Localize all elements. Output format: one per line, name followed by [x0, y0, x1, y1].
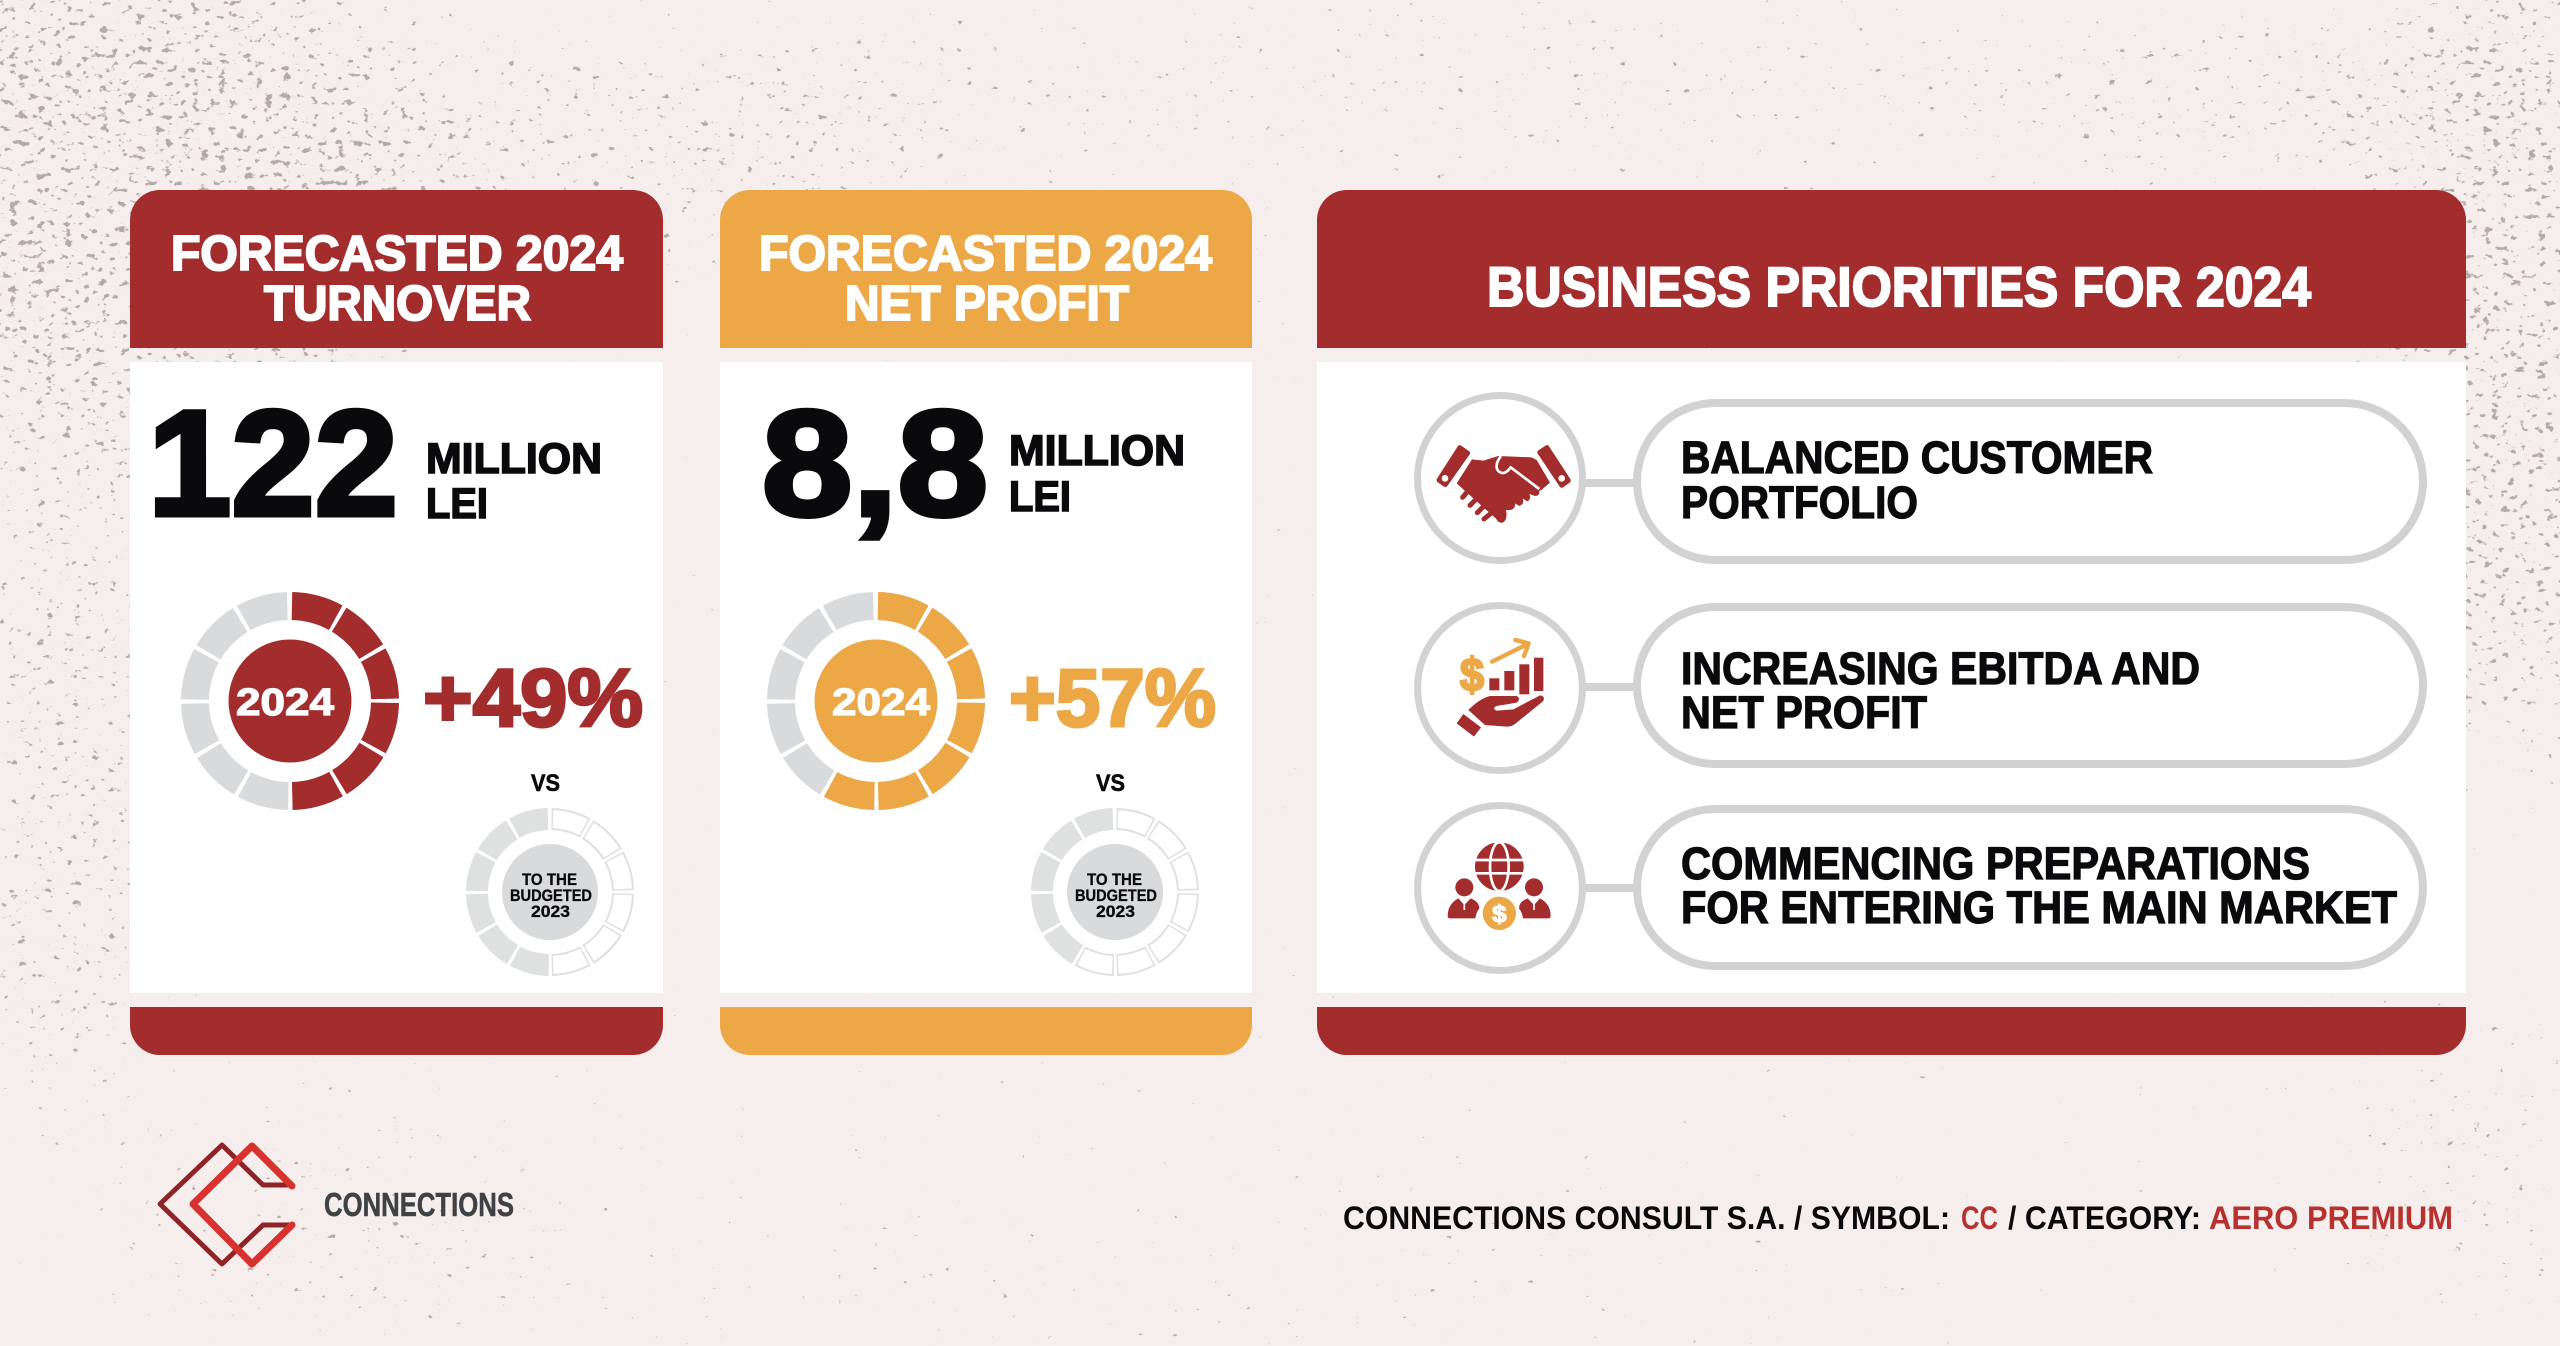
donut chart: budgeted 2023 net profit: BUDGETED	[1075, 886, 1157, 905]
panel header: net profit: NET PROFIT	[845, 277, 1129, 331]
company, symbol and category line: CONNECTIONS CONSULT S.A. / SYMBOL:	[1343, 1200, 1950, 1236]
icon: growth in hand	[1418, 606, 1582, 770]
donut chart: budgeted 2023 net profit: 2023	[1096, 902, 1135, 921]
company, symbol and category line	[1343, 1200, 2453, 1236]
logo: connections: CONNECTIONS	[324, 1186, 514, 1223]
donut chart: 2024 turnover: 2024	[236, 682, 334, 724]
panel header: net profit	[720, 190, 1252, 348]
priority row: balanced customer portfolio	[1418, 396, 2423, 560]
connector	[1585, 884, 1639, 892]
priority row: increasing ebitda and net profit	[1418, 606, 2423, 770]
icon: globe, people and dollar	[1418, 806, 1582, 970]
donut chart: 2024 net profit: 2024	[832, 682, 930, 724]
pill: commencing preparations	[1637, 809, 2423, 966]
panel header: business priorities	[1317, 190, 2466, 348]
panel: business priorities	[1317, 190, 2466, 1055]
panel: forecasted turnover	[130, 190, 663, 1055]
panel footer bar: business priorities	[1317, 1007, 2466, 1055]
change: +57%: +57%	[1009, 653, 1216, 744]
pill: balanced customer portfolio: PORTFOLIO	[1681, 477, 1918, 528]
company, symbol and category line: AERO PREMIUM	[2209, 1200, 2453, 1236]
donut chart: 2024 net profit	[781, 606, 971, 796]
big number 8,8: 8,8	[762, 379, 988, 547]
unit: million lei	[426, 435, 602, 528]
unit: million lei: LEI	[1009, 473, 1071, 521]
unit: million lei: MILLION	[1009, 427, 1185, 475]
panel header: turnover: FORECASTED 2024	[171, 227, 623, 281]
priority row: commencing preparations	[1418, 806, 2423, 970]
panel header: turnover: TURNOVER	[264, 277, 531, 331]
panel header: turnover	[130, 190, 663, 348]
connector	[1585, 479, 1639, 487]
donut chart: 2024 turnover	[195, 606, 385, 796]
donut chart: budgeted 2023 turnover	[477, 819, 623, 965]
panel body: business priorities	[1317, 362, 2466, 993]
logo: connections	[160, 1145, 514, 1264]
big number 122: 122	[148, 379, 398, 547]
pill: balanced customer portfolio: BALANCED CUSTOMER	[1681, 432, 2153, 483]
pill: increasing ebitda and net profit	[1637, 607, 2423, 764]
company, symbol and category line: CC	[1961, 1200, 1998, 1236]
panel footer bar: turnover	[130, 1007, 663, 1055]
pill: increasing ebitda and net profit: NET PROFIT	[1681, 687, 1927, 738]
panel body: turnover	[130, 362, 663, 993]
change: +49%: +49%	[423, 653, 643, 744]
label: vs: VS	[1096, 770, 1125, 797]
panel header: net profit: FORECASTED 2024	[759, 227, 1212, 281]
donut chart: budgeted 2023 net profit	[1042, 819, 1188, 965]
unit: million lei: LEI	[426, 480, 488, 528]
panel header: business priorities: BUSINESS PRIORITIES FOR 2024	[1487, 255, 2311, 318]
pill: increasing ebitda and net profit: INCREASING EBITDA AND	[1681, 643, 2200, 694]
pill: commencing preparations: FOR ENTERING THE MAIN MARKET	[1681, 882, 2397, 933]
donut chart: budgeted 2023 turnover: BUDGETED	[510, 886, 592, 905]
pill: balanced customer portfolio	[1637, 403, 2423, 560]
unit: million lei: MILLION	[426, 435, 602, 483]
panel: forecasted net profit	[720, 190, 1252, 1055]
donut chart: budgeted 2023 net profit: TO THE	[1087, 870, 1142, 889]
panel footer bar: net profit	[720, 1007, 1252, 1055]
connector	[1585, 683, 1639, 691]
icon: globe, people and dollar: $	[1492, 901, 1507, 928]
donut chart: budgeted 2023 turnover: TO THE	[522, 870, 577, 889]
panel body: net profit	[720, 362, 1252, 993]
icon: growth in hand: $	[1460, 648, 1484, 700]
label: vs: VS	[531, 770, 560, 797]
pill: commencing preparations: COMMENCING PREPARATIONS	[1681, 838, 2310, 889]
donut chart: budgeted 2023 turnover: 2023	[531, 902, 570, 921]
company, symbol and category line: / CATEGORY:	[2008, 1200, 2201, 1236]
icon: handshake	[1418, 396, 1582, 560]
unit: million lei	[1009, 427, 1185, 521]
